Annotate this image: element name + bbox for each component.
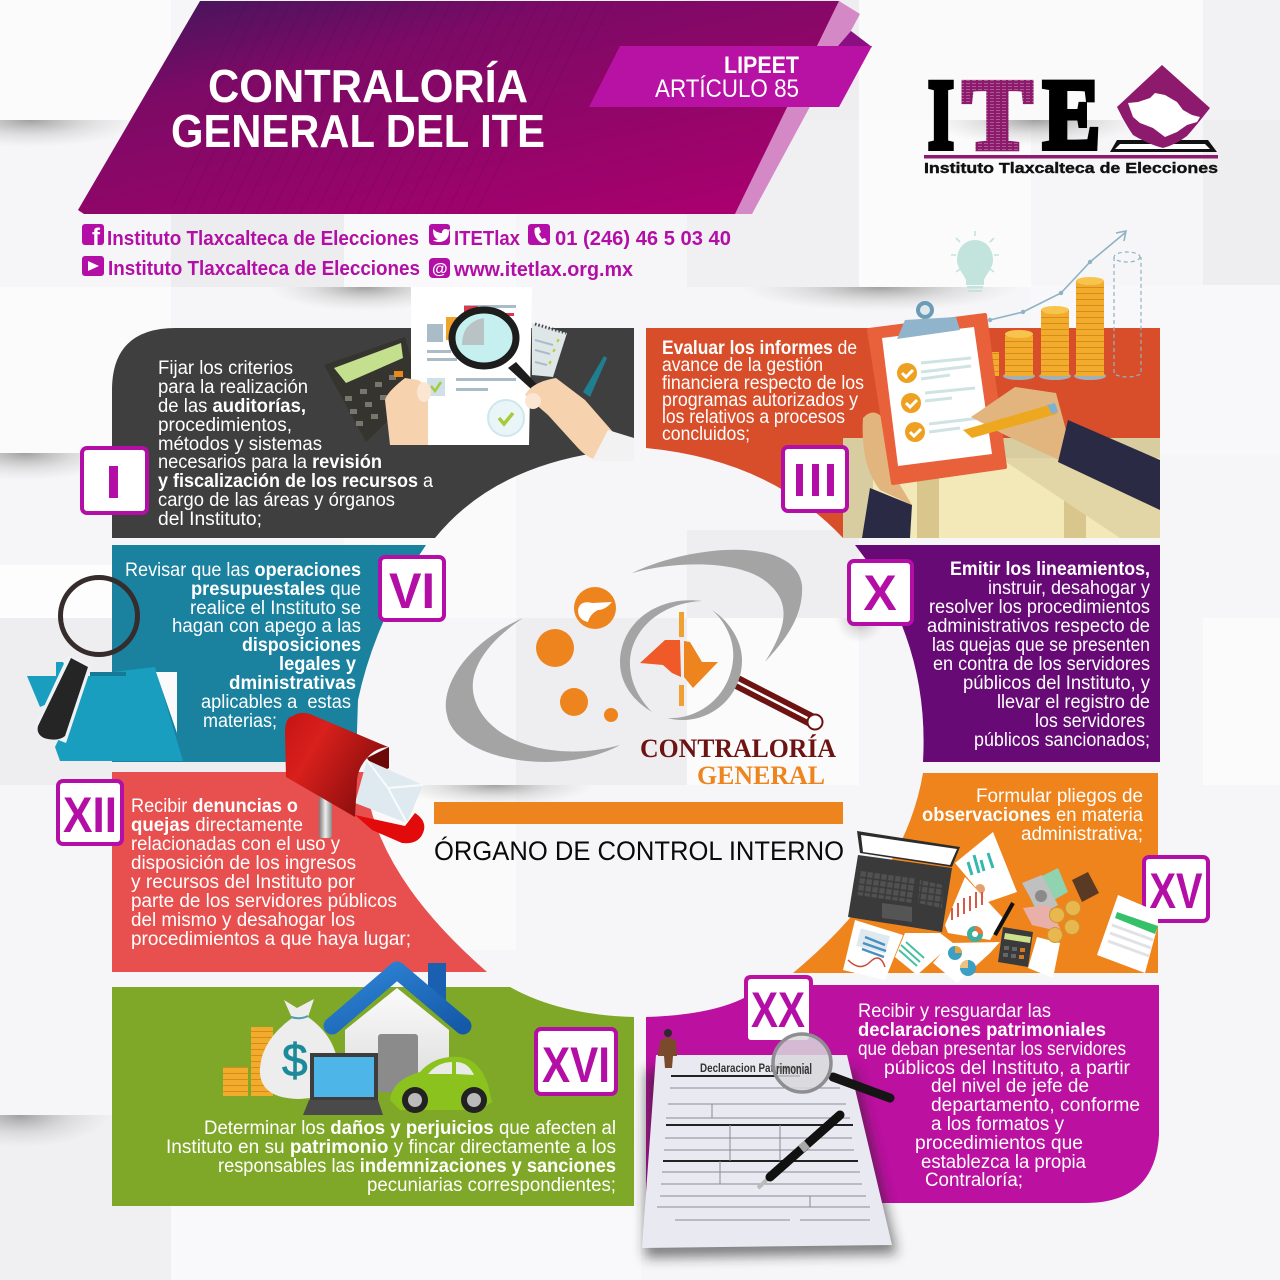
icon: hands	[385, 378, 634, 461]
icon: spreadsheet document	[1097, 895, 1158, 973]
icon: notepad and pen	[532, 323, 607, 397]
text: fraction XX: Contraloría;	[925, 1170, 1023, 1191]
text: fraction VI: Revisar que las operaciones	[125, 560, 361, 581]
icon: writing hand	[963, 387, 1160, 510]
ribbon: LIPEET Artículo 85	[589, 31, 872, 107]
text: fraction X: públicos sancionados;	[974, 730, 1150, 751]
dashed cylinder	[1114, 252, 1141, 377]
pale accent band	[735, 1, 860, 214]
text: fraction X: administrativos respecto de	[927, 616, 1150, 637]
text: fraction XX: del nivel de jefe de	[931, 1076, 1089, 1097]
text: fraction X: Emitir los lineamientos,	[950, 559, 1150, 580]
text: fraction XII	[131, 796, 411, 950]
icon: pen	[758, 1115, 840, 1188]
text: fraction III: programas autorizados y	[662, 390, 858, 411]
contact information: 01 (246) 46 5 03 40	[555, 228, 731, 250]
text: fraction XII: y recursos del Instituto por	[131, 872, 356, 893]
text: fraction XV	[922, 786, 1143, 845]
icon: folder	[27, 662, 183, 761]
text: fraction XX: establezca la propia	[921, 1152, 1086, 1173]
contact information: www.itetlax.org.mx	[453, 259, 633, 281]
text: fraction I: para la realización	[158, 377, 308, 398]
panel: fraction I	[82, 287, 634, 538]
logo letters: I	[928, 59, 954, 170]
panel: fraction XII	[58, 713, 487, 972]
icon: laptop	[848, 831, 960, 932]
heading: organo de control interno: ÓRGANO DE CONTROL INTERNO	[434, 835, 844, 866]
upper swoosh	[632, 550, 802, 662]
ballot box	[1110, 140, 1217, 152]
panel: fraction XV	[793, 773, 1208, 983]
logo wording: GENERAL	[697, 761, 825, 790]
text: fraction XII: disposición de los ingresos	[131, 853, 356, 874]
text: fraction XV: Formular pliegos de	[976, 786, 1143, 807]
central logo: Contraloría General	[446, 550, 836, 790]
text: fraction XVI: Instituto en su patrimonio y fincar directamente a los	[166, 1137, 616, 1158]
text: fraction XV: administrativa;	[1021, 824, 1143, 845]
text: fraction XX: declaraciones patrimoniales	[858, 1020, 1106, 1041]
icon: coin stacks	[990, 277, 1106, 380]
ITE logo	[924, 59, 1218, 177]
panel: fraction XX	[642, 975, 1159, 1258]
number box I	[82, 448, 147, 513]
text: fraction X: en contra de los servidores	[933, 654, 1150, 675]
icon: twitter	[429, 224, 450, 245]
text: fraction VI: disposiciones	[242, 635, 361, 656]
icon: house	[332, 963, 463, 1092]
text: fraction I: cargo de las áreas y órganos	[158, 490, 395, 511]
text: fraction VI: legales y	[279, 654, 356, 675]
text: fraction XX: departamento, conforme	[931, 1095, 1140, 1116]
text: fraction X: públicos del Instituto, y	[963, 673, 1150, 694]
text: fraction III: los relativos a procesos	[662, 407, 845, 428]
text: fraction XII: quejas directamente	[131, 815, 303, 836]
text: fraction X: resolver los procedimientos	[929, 597, 1150, 618]
icon: audited document	[411, 287, 532, 445]
text: fraction XX	[858, 1001, 1140, 1191]
icon: facebook: f	[92, 224, 101, 251]
logo wording	[640, 734, 836, 790]
text: fraction X	[927, 559, 1150, 751]
text: fraction XVI: Determinar los daños y perjuicios que afecten al	[204, 1118, 616, 1139]
logo letters	[928, 59, 1100, 170]
panel: fraction VI	[27, 545, 444, 762]
magnifier ring	[620, 600, 742, 720]
icon: magnifier	[452, 310, 556, 408]
text: fraction VI: materias;	[203, 711, 277, 732]
number box XVI: XVI	[542, 1037, 610, 1093]
logo letters: T	[963, 59, 1032, 170]
icon: small figure	[658, 1029, 677, 1068]
icon: mailbox	[285, 713, 424, 843]
text: fraction I: Fijar los criterios	[158, 358, 293, 379]
text: fraction XII: del mismo y desahogar los	[131, 910, 355, 931]
text: fraction XVI	[166, 1118, 616, 1196]
text: fraction I: y fiscalización de los recursos a	[158, 471, 433, 492]
icon: laptop	[303, 1053, 383, 1115]
text: fraction XV: observaciones en materia	[922, 805, 1143, 826]
text: fraction III	[662, 338, 864, 445]
icon: phone	[528, 224, 550, 245]
text: fraction III: concluidos;	[662, 424, 750, 445]
number box XII: XII	[63, 787, 117, 843]
icon: light bulb	[951, 231, 999, 292]
text: fraction I: del Instituto;	[158, 509, 262, 530]
number box XX: XX	[751, 982, 805, 1038]
text: fraction I: de las auditorías,	[158, 396, 306, 417]
text: fraction XX: que deban presentar los servidores	[858, 1039, 1126, 1060]
icon: document magnifier: rimonial	[776, 1061, 812, 1078]
icon: coins	[223, 1027, 273, 1096]
text: fraction X: los servidores	[1035, 711, 1145, 732]
text: fraction XII: Recibir denuncias o	[131, 796, 298, 817]
icon: calculator	[324, 337, 420, 442]
text: fraction XX: Recibir y resguardar las	[858, 1001, 1051, 1022]
text: fraction VI: aplicables a estas	[201, 692, 351, 713]
icon: magnifier	[33, 578, 138, 743]
text: fraction VI: presupuestales que	[191, 579, 361, 600]
ribbon: LIPEET Artículo 85: ARTÍCULO 85	[655, 74, 799, 103]
panel: fraction XVI	[112, 963, 634, 1206]
text: fraction X: instruir, desahogar y	[988, 578, 1150, 599]
icon: money bag: $	[282, 1034, 308, 1086]
text: fraction X: las quejas que se presenten	[932, 635, 1150, 656]
orange circles	[536, 587, 618, 722]
contact information: ITETlax	[454, 228, 520, 250]
ITE logo: Instituto Tlaxcalteca de Elecciones	[924, 160, 1218, 177]
text: fraction III: financiera respecto de los	[662, 373, 864, 394]
text: fraction VI: realice el Instituto se	[190, 598, 361, 619]
icon: clipboard with checklist	[869, 303, 1005, 483]
icon: facebook	[82, 224, 104, 251]
icon: at sign: @	[432, 261, 448, 278]
number box X: X	[863, 565, 897, 621]
text: fraction I: procedimientos,	[158, 415, 292, 436]
ribbon: LIPEET Artículo 85: LIPEET	[724, 52, 799, 79]
number box III	[783, 447, 847, 511]
text: fraction VI	[125, 560, 361, 732]
icon: youtube	[82, 256, 104, 276]
icon: declaration form: Declaracion Patrimonial	[700, 1061, 812, 1075]
central map	[640, 612, 718, 706]
number box VI	[380, 557, 444, 620]
title	[171, 60, 545, 157]
text: fraction X: llevar el registro de	[997, 692, 1150, 713]
text: fraction I: métodos y sistemas	[158, 434, 322, 455]
number box XV: XV	[1150, 863, 1203, 919]
magnifier handle	[737, 682, 822, 730]
logo letters: E	[1043, 59, 1100, 170]
text: fraction III: Evaluar los informes de	[662, 338, 857, 359]
text: fraction XVI: pecuniarias correspondientes;	[367, 1175, 616, 1196]
text: fraction XX: a los formatos y	[931, 1114, 1064, 1135]
contact information: Instituto Tlaxcalteca de Elecciones	[108, 258, 420, 280]
icon: declaration form	[642, 1055, 897, 1258]
left swoosh	[446, 618, 620, 762]
contact information	[82, 224, 731, 281]
panel: fraction III	[646, 231, 1160, 538]
title: CONTRALORÍA	[208, 60, 528, 112]
text: fraction XVI: responsables las indemnizaciones y sanciones	[218, 1156, 616, 1177]
text: fraction III: avance de la gestión	[662, 355, 823, 376]
icon: money and coins	[1022, 868, 1099, 942]
number box VI: VI	[389, 563, 435, 619]
accent bar	[434, 802, 843, 824]
text: fraction I: necesarios para la revisión	[158, 452, 382, 473]
text: fraction XII: procedimientos a que haya lugar;	[131, 929, 411, 950]
contact information: Instituto Tlaxcalteca de Elecciones	[107, 228, 419, 250]
icon: charts and papers	[843, 832, 1017, 983]
text: fraction XX: públicos del Instituto, a partir	[884, 1058, 1131, 1079]
growth arrow	[988, 231, 1126, 322]
text: fraction XII: parte de los servidores públicos	[131, 891, 397, 912]
header banner	[78, 1, 872, 214]
state map shield	[1117, 65, 1210, 148]
title: GENERAL DEL ITE	[171, 105, 545, 157]
icon: green car	[390, 1057, 492, 1113]
text: fraction XII: relacionadas con el uso y	[131, 834, 340, 855]
desk scene	[843, 438, 1160, 538]
text: fraction XX: procedimientos que	[915, 1133, 1083, 1154]
sleeve and hand left	[862, 412, 912, 538]
text: fraction I	[158, 358, 433, 530]
text: fraction VI: dministrativas	[229, 673, 356, 694]
icon: calculator and pen	[995, 903, 1060, 978]
text: fraction VI: hagan con apego a las	[172, 616, 361, 637]
panel: fraction X	[849, 545, 1160, 762]
icon: money bag	[260, 999, 338, 1099]
number box X	[849, 561, 912, 624]
logo wording: CONTRALORÍA	[640, 734, 836, 763]
icon: at sign	[429, 258, 450, 278]
icon: document magnifier	[773, 1034, 890, 1098]
